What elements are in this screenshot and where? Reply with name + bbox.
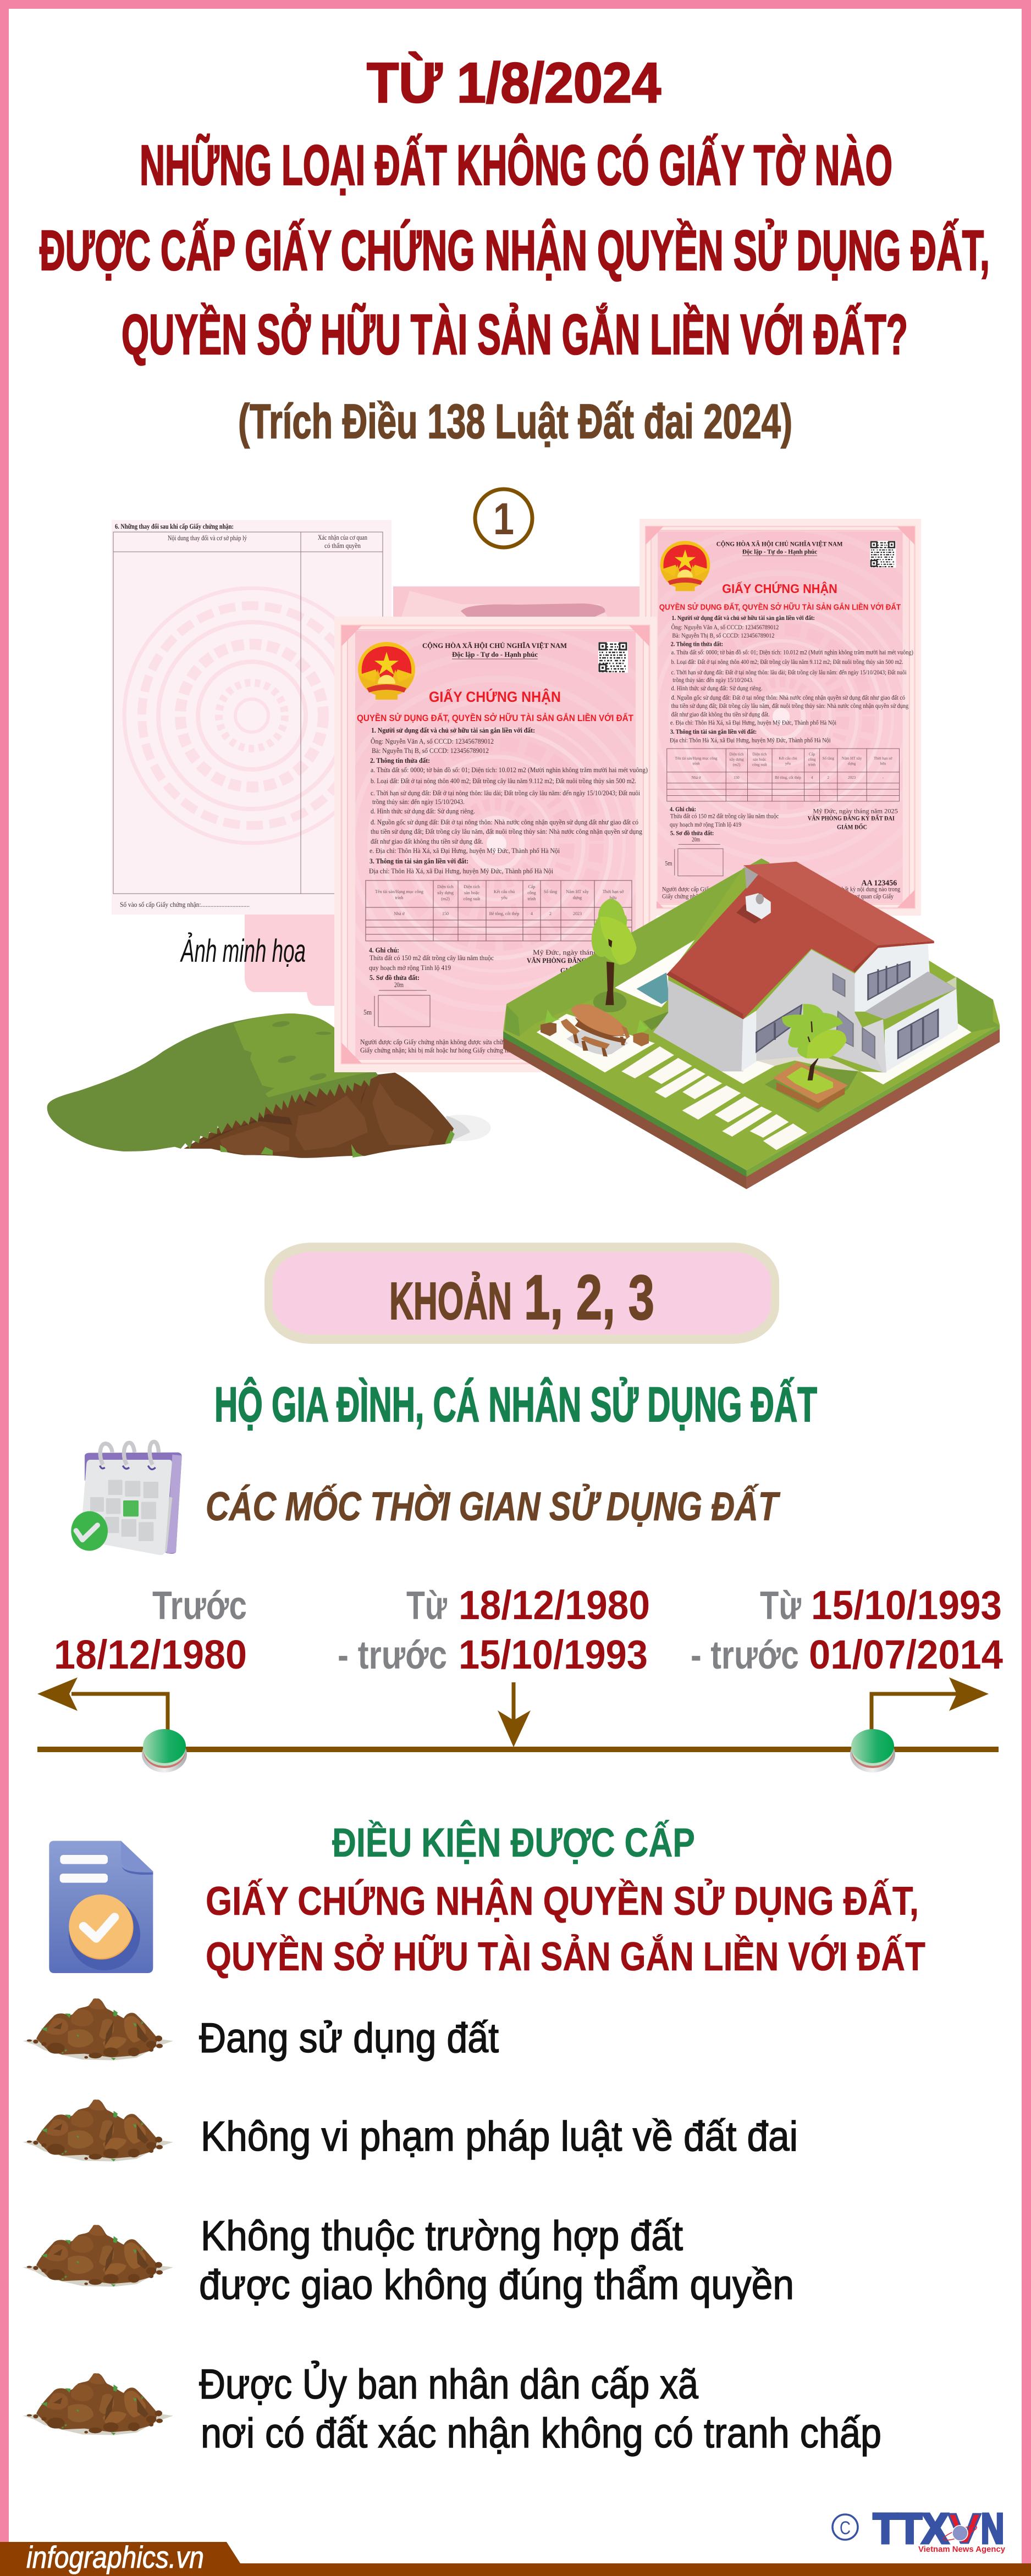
certificate: front copy: d. Hình thức sử dụng đất: Sử dụng riêng. <box>371 807 475 815</box>
certificate: right copy: 3. Thông tin tài sản gắn liền với đất: <box>670 729 757 735</box>
certificate: right copy: AA 123456 <box>862 879 897 888</box>
back page of certificate: Nội dung thay đổi và cơ sở pháp lý <box>168 534 247 542</box>
certificate: front copy: a. Thửa đất số: 0000; tờ bản đồ số: 01; Diện tích: 10.012 m2 (Mười nghìn không trăm mười hai mét vuông) <box>371 766 648 774</box>
condition 4: Được Ủy ban nhân dân cấp xã <box>199 2361 699 2408</box>
back page of certificate: Số vào sổ cấp Giấy chứng nhận:............................... <box>120 900 250 908</box>
certificate: front copy: hữu <box>610 895 616 900</box>
title: TỪ 1/8/2024 <box>367 51 661 114</box>
certificate: right copy: đất như giao đất không thu tiền sử dụng đất. <box>671 712 770 718</box>
certificate: right copy: 4 <box>811 775 813 780</box>
certificate: right copy: QUYỀN SỬ DỤNG ĐẤT, QUYỀN SỞ HỮU TÀI SẢN GẮN LIỀN VỚI ĐẤT <box>659 602 901 612</box>
certificate: front copy: trình <box>395 895 404 900</box>
certificate: right copy: Ông: Nguyễn Văn A, số CCCD: 123456789012 <box>671 624 779 631</box>
timeline axis <box>37 1747 999 1752</box>
certificate: right copy: Thời hạn sở <box>874 756 892 761</box>
certificate: right copy: Số tầng <box>823 756 834 761</box>
caption: illustrative image: Ảnh minh họa <box>180 933 306 969</box>
certificate: right copy: Kết cấu chủ <box>779 756 797 761</box>
certificate: right copy: Độc lập - Tự do - Hạnh phúc <box>742 549 817 556</box>
section number badge: 1 <box>493 494 514 544</box>
certificate: right copy: dựng <box>848 762 856 766</box>
certificate: right copy: CỘNG HÒA XÃ HỘI CHỦ NGHĨA VIỆT NAM <box>716 541 843 548</box>
certificate: right copy: 2023 <box>848 775 856 780</box>
certificate: front copy: Kết cấu chủ <box>494 889 515 894</box>
certificate: front copy: 4 <box>531 911 533 916</box>
certificate: front copy: e. Địa chỉ: Thôn Hà Xá, xã Đại Hưng, huyện Mỹ Đức, Thành phố Hà Nội <box>370 846 560 855</box>
certificate: front copy: Cấp <box>528 884 535 889</box>
footer band with site name <box>0 2540 1031 2576</box>
logo: TTXVN Vietnam News Agency: V <box>948 2505 981 2552</box>
heading: land use time milestones: CÁC MỐC THỜI GIAN SỬ DỤNG ĐẤT <box>206 1484 780 1529</box>
certificate: right copy: trồng thủy sản: đến ngày 15/10/2043. <box>672 677 753 684</box>
timeline date label: before 18/12/1980: Trước <box>152 1584 247 1628</box>
title <box>40 51 990 366</box>
certificate: right copy: công suất <box>752 762 767 767</box>
logo: TTXVN Vietnam News Agency <box>832 2505 1006 2554</box>
certificate: front copy: 2 <box>549 911 552 916</box>
certificate: front copy <box>279 617 714 1072</box>
certificate: right copy: trình <box>692 762 700 766</box>
condition 1 <box>23 1998 499 2062</box>
certificate: front copy: CỘNG HÒA XÃ HỘI CHỦ NGHĨA VIỆT NAM <box>422 641 567 650</box>
condition 4 <box>23 2361 881 2457</box>
certificate: front copy: Số tầng <box>544 889 557 894</box>
certificate: front copy: công <box>527 890 536 895</box>
icon: isometric house on green plot <box>503 858 1000 1189</box>
certificate: right copy: 1. Người sử dụng đất và chủ sở hữu tài sản gắn liền với đất: <box>672 615 815 622</box>
icon: soil mound <box>23 1998 173 2060</box>
certificate: front copy: quy hoạch mở rộng Tỉnh lộ 419 <box>369 963 451 972</box>
certificate: right copy: 5m <box>665 861 672 867</box>
timeline date label: 18/12/1980 to 15/10/1993: Từ <box>406 1584 448 1628</box>
timeline date label: 18/12/1980 to 15/10/1993: 15/10/1993 <box>459 1632 648 1677</box>
certificate: right copy: - <box>883 775 884 780</box>
certificate: front copy: GIẤY CHỨNG NHẬN <box>429 688 561 705</box>
certificate: front copy: VĂN PHÒNG ĐĂNG KÝ ĐẤT ĐAI <box>527 956 626 965</box>
heading: land use right certificate <box>206 1879 925 1979</box>
section badge: clauses 1, 2, 3: 1, 2, 3 <box>524 1262 654 1333</box>
certificate: right copy: hữu <box>880 762 886 766</box>
certificate: right copy: d. Hình thức sử dụng đất: Sử dụng riêng. <box>671 685 763 692</box>
certificate: front copy: Ông: Nguyễn Văn A, số CCCD: 123456789012 <box>371 737 494 745</box>
certificate: front copy: GIÁM ĐỐC <box>560 966 595 974</box>
back page of certificate <box>112 520 392 915</box>
arrow: centre, down to axis <box>498 1682 531 1747</box>
heading: land use right certificate: GIẤY CHỨNG NHẬN QUYỀN SỬ DỤNG ĐẤT, <box>206 1879 919 1924</box>
certificate: right copy: Giấy chứng nhận; khi bị mất hoặc hư hỏng Giấy chứng nhận phải khai báo ngay với cơ quan cấp Giấy <box>662 894 894 900</box>
certificate: front copy: 5m <box>363 1008 372 1016</box>
certificate: right copy: Địa chỉ: Thôn Hà Xá, xã Đại Hưng, huyện Mỹ Đức, Thành phố Hà Nội <box>670 738 831 744</box>
certificate: right copy: 4. Ghi chú: <box>670 806 696 813</box>
certificate: front copy: Năm HT xây <box>566 889 589 894</box>
certificate: front copy: (m2) <box>441 896 450 901</box>
section badge: clauses 1, 2, 3 <box>264 1243 779 1344</box>
certificate: front copy: 5. Sơ đồ thửa đất: <box>370 973 420 982</box>
timeline date label: before 18/12/1980 <box>54 1584 247 1677</box>
certificate: front copy: 3. Thông tin tài sản gắn liền với đất: <box>370 857 468 865</box>
certificate: right copy: 150 <box>734 775 740 780</box>
certificate: front copy: 2. Thông tin thửa đất: <box>370 756 430 765</box>
timeline date label: 15/10/1993 to 01/07/2014: Từ <box>760 1584 802 1628</box>
subtitle: legal source: (Trích Điều 138 Luật Đất đai 2024) <box>238 394 792 448</box>
certificate: front copy: công suất <box>464 896 481 901</box>
heading: conditions for granting: ĐIỀU KIỆN ĐƯỢC CẤP <box>332 1820 695 1865</box>
certificate: front copy: Diện tích <box>437 884 454 889</box>
certificate: right copy: quy hoạch mở rộng Tỉnh lộ 419 <box>670 822 741 828</box>
condition 3 <box>23 2213 794 2308</box>
certificate: right copy: b. Loại đất: Đất ở tại nông thôn 400 m2; Đất trồng cây lâu năm 9.112 m2; Đất nuôi trồng thủy sản 500 m2. <box>671 659 903 666</box>
icon: soil mound <box>23 2225 173 2287</box>
certificate: front copy: Người được cấp Giấy chứng nhận không được sửa chữa, tẩy xóa hoặc bổ sung bất kỳ nội dung nào trong <box>360 1038 633 1046</box>
certificate: front copy: thu tiền sử dụng đất; Đất trồng cây lâu năm, đất nuôi trồng thủy sản: Nhà nước công nhận quyền sử dụng <box>371 827 642 835</box>
certificate: right copy: Diện tích <box>752 752 767 756</box>
timeline date label: 15/10/1993 to 01/07/2014: 01/07/2014 <box>809 1632 1003 1677</box>
certificate: right copy: đ. Nguồn gốc sử dụng đất: Đất ở tại nông thôn: Nhà nước công nhận quyền sử dụng đất như giao đất có <box>671 695 905 701</box>
certificate: right copy: sàn hoặc <box>753 757 766 762</box>
logo: TTXVN Vietnam News Agency: C <box>840 2518 851 2539</box>
certificate: right copy: Tên tài sản/Hạng mục công <box>675 756 718 761</box>
certificate: right copy: GIÁM ĐỐC <box>837 823 867 830</box>
certificate: right copy: 5. Sơ đồ thửa đất: <box>670 830 714 837</box>
condition 3: Không thuộc trường hợp đất <box>201 2213 683 2259</box>
condition 2: Không vi phạm pháp luật về đất đai <box>201 2113 798 2160</box>
certificate: right copy: Thửa đất có 150 m2 đất trồng cây lâu năm thuộc <box>670 813 779 819</box>
certificate: right copy: 2 <box>828 775 830 780</box>
logo: TTXVN Vietnam News Agency: Vietnam News Agency <box>918 2545 1006 2554</box>
certificate: front copy: Mỹ Đức, ngày tháng năm 2025 <box>533 948 630 956</box>
icon: document with check <box>49 1841 153 1973</box>
certificate: front copy: Bà: Nguyễn Thị B, số CCCD: 123456789012 <box>372 746 489 755</box>
arrow: left, before first milestone <box>37 1677 168 1731</box>
condition 1: Đang sử dụng đất <box>199 2015 499 2062</box>
certificate: front copy: Giấy chứng nhận; khi bị mất hoặc hư hỏng Giấy chứng nhận phải khai báo ngay với cơ quan cấp Giấy <box>360 1046 625 1054</box>
certificate: right copy: Nhà ở <box>692 775 701 780</box>
certificate: front copy: 20m <box>394 980 404 989</box>
certificate: front copy: Diện tích <box>464 884 480 889</box>
certificate: front copy: đ. Nguồn gốc sử dụng đất: Đất ở tại nông thôn: Nhà nước công nhận quyền sử dụng đất như giao đất có <box>371 818 638 826</box>
illustration: land certificates, hill and house <box>47 519 1000 1189</box>
certificate: right copy: Người được cấp Giấy chứng nhận không được sửa chữa, tẩy xóa hoặc bổ sung bất kỳ nội dung nào trong <box>662 887 901 893</box>
certificate: right copy: thu tiền sử dụng đất; Đất trồng cây lâu năm, đất nuôi trồng thủy sản: Nhà nước công nhận quyền sử dụng <box>671 703 908 710</box>
certificate: front copy: Địa chỉ: Thôn Hà Xá, xã Đại Hưng, huyện Mỹ Đức, Thành phố Hà Nội <box>369 867 553 875</box>
timeline date label: before 18/12/1980: 18/12/1980 <box>54 1632 247 1677</box>
certificate: front copy: 150 <box>442 911 449 916</box>
certificate: front copy: Nhà ở <box>394 911 405 916</box>
certificate: front copy: Tên tài sản/Hạng mục công <box>375 889 423 894</box>
timeline date label: 18/12/1980 to 15/10/1993: 18/12/1980 <box>459 1582 650 1628</box>
certificate: right copy: Bê tông, cốt thép <box>775 775 801 780</box>
icon: soil mound <box>23 2099 173 2162</box>
logo: TTXVN Vietnam News Agency: TTX <box>873 2505 949 2552</box>
certificate: right copy: Cấp <box>809 752 815 756</box>
icon: green hill with soil <box>47 1013 491 1158</box>
icon: calendar with green check <box>71 1442 182 1555</box>
certificate: right copy: c. Thời hạn sử dụng đất: Đất ở tại nông thôn: lâu dài; Đất trồng cây lâu năm: đến ngày 15/10/2043; Đất nuôi <box>671 669 907 676</box>
inner pink page, top strip <box>393 586 639 617</box>
certificate: front copy: dựng <box>573 895 582 900</box>
timeline date label: 15/10/1993 to 01/07/2014: 15/10/1993 <box>811 1582 1002 1628</box>
certificate: front copy: c. Thời hạn sử dụng đất: Đất ở tại nông thôn: lâu dài; Đất trồng cây lâu năm: đến ngày 15/10/2043; Đất nuôi <box>371 789 640 797</box>
certificate: front copy: Thời hạn sở <box>603 889 624 894</box>
certificate: right copy: 20m <box>692 836 700 843</box>
back page of certificate: 6. Những thay đổi sau khi cấp Giấy chứng nhận: <box>115 522 234 530</box>
certificate: front copy: Bê tông, cốt thép <box>489 911 519 916</box>
certificate: right copy: GIẤY CHỨNG NHẬN <box>722 581 837 596</box>
certificate: right copy: e. Địa chỉ: Thôn Hà Xá, xã Đại Hưng, huyện Mỹ Đức, Thành phố Hà Nội <box>670 720 836 727</box>
logo: TTXVN Vietnam News Agency: N <box>981 2505 1004 2552</box>
certificate: front copy: yếu <box>501 895 508 900</box>
icon: soil mound <box>23 2373 173 2435</box>
certificate: right copy: yếu <box>785 762 791 766</box>
certificate: right copy: Diện tích <box>730 752 744 756</box>
certificate: right copy: xây dựng <box>729 757 744 762</box>
certificate: right copy: a. Thửa đất số: 0000; tờ bản đồ số: 01; Diện tích: 10.012 m2 (Mười nghìn không trăm mười hai mét vuông) <box>671 650 913 656</box>
timeline date label: 15/10/1993 to 01/07/2014: - trước <box>691 1633 799 1677</box>
certificate: front copy: b. Loại đất: Đất ở tại nông thôn 400 m2; Đất trồng cây lâu năm 9.112 m2; Đất nuôi trồng thủy sản 500 m2. <box>371 777 636 785</box>
condition 2 <box>23 2099 798 2162</box>
certificate: front copy: đất như giao đất không thu tiền sử dụng đất. <box>371 837 483 845</box>
certificate: front copy: trồng thủy sản: đến ngày 15/10/2043. <box>372 797 465 806</box>
timeline date label: 15/10/1993 to 01/07/2014 <box>691 1582 1003 1677</box>
timeline marker: left green button <box>142 1729 187 1772</box>
certificate: front copy: sàn hoặc <box>464 890 479 895</box>
timeline date label: 18/12/1980 to 15/10/1993 <box>338 1582 650 1677</box>
certificate: right copy: Năm HT xây <box>842 756 862 761</box>
certificate: right copy: Mỹ Đức, ngày tháng năm 2025 <box>813 808 898 815</box>
certificate: front copy: trình <box>527 896 536 901</box>
back page of certificate: có thẩm quyền <box>324 541 361 550</box>
certificate: right copy: (m2) <box>733 762 741 767</box>
section badge: clauses 1, 2, 3: KHOẢN <box>389 1271 512 1331</box>
section number badge <box>475 489 532 547</box>
certificate: right copy <box>592 519 971 916</box>
arrow: right, after last milestone <box>872 1677 989 1731</box>
certificate: right copy: công <box>808 757 816 762</box>
certificate: right copy: Bà: Nguyễn Thị B, số CCCD: 123456789012 <box>672 633 775 639</box>
certificate: front copy: 2023 <box>573 911 582 916</box>
condition 4: nơi có đất xác nhận không có tranh chấp <box>201 2410 881 2457</box>
certificate: right copy: VĂN PHÒNG ĐĂNG KÝ ĐẤT ĐAI <box>808 815 895 822</box>
certificate: front copy: QUYỀN SỬ DỤNG ĐẤT, QUYỀN SỞ HỮU TÀI SẢN GẮN LIỀN VỚI ĐẤT <box>357 712 634 723</box>
back page of certificate: Xác nhận của cơ quan <box>318 533 367 541</box>
certificate: front copy: Thửa đất có 150 m2 đất trồng cây lâu năm thuộc <box>370 954 494 962</box>
certificate: front copy: 4. Ghi chú: <box>369 946 399 954</box>
certificate: front copy: Độc lập - Tự do - Hạnh phúc <box>452 650 538 658</box>
certificate: front copy: xây dựng <box>437 890 454 895</box>
certificate: front copy: 1. Người sử dụng đất và chủ sở hữu tài sản gắn liền với đất: <box>371 726 535 734</box>
certificate: right copy: trình <box>808 762 816 767</box>
timeline marker: right green button <box>850 1729 895 1772</box>
certificate: right copy: 2. Thông tin thửa đất: <box>671 641 723 648</box>
condition 3: được giao không đúng thẩm quyền <box>199 2262 794 2308</box>
inner pink page, bottom strip <box>245 915 335 1006</box>
footer band with site name: infographics.vn <box>26 2540 204 2574</box>
timeline date label: 18/12/1980 to 15/10/1993: - trước <box>338 1633 447 1677</box>
